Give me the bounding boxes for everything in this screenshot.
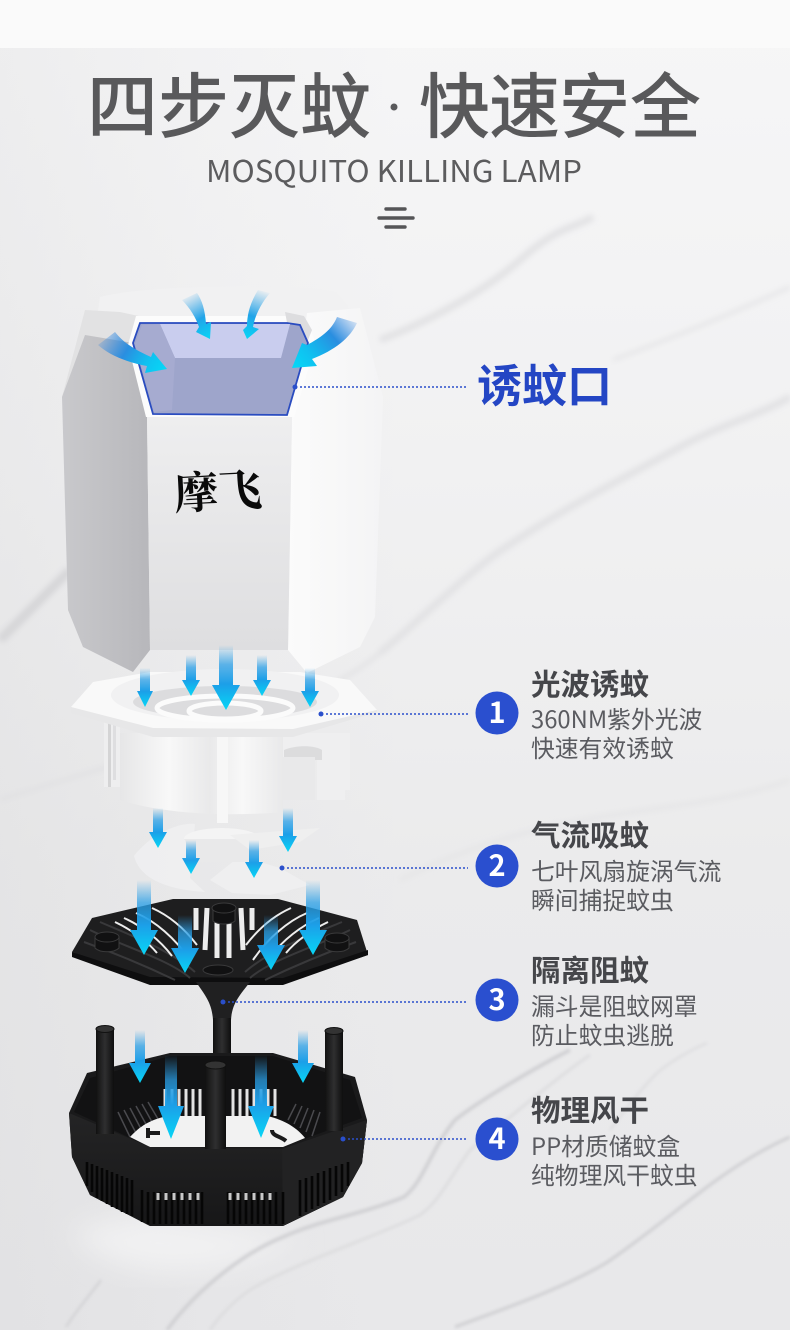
- callout 3: isolation: 漏斗是阻蚊网罩: [531, 987, 698, 1022]
- callout 3: isolation: 防止蚊虫逃脱: [531, 1016, 674, 1051]
- basket pillars: [96, 1029, 114, 1134]
- basket side wall slats: [118, 1102, 320, 1137]
- funnel net: [72, 899, 368, 1068]
- callout 2: airflow suction: [280, 813, 721, 916]
- callout 1: light lure: [318, 662, 703, 764]
- title: [87, 51, 701, 153]
- callout 3: isolation: [220, 948, 698, 1051]
- funnel bolts: [95, 903, 349, 975]
- icon: title ornament: [379, 209, 413, 227]
- callout: lure opening: [292, 350, 612, 415]
- subtitle: MOSQUITO KILLING LAMP: [206, 147, 582, 191]
- lamp lid: [95, 286, 350, 330]
- right assembly: [283, 733, 350, 800]
- callout 1: light lure: 光波诱蚊: [531, 662, 649, 704]
- callout 1: light lure: 快速有效诱蚊: [531, 729, 674, 764]
- callout 1: light lure: 1: [488, 690, 506, 732]
- callout 2: airflow suction: 2: [488, 843, 506, 885]
- arrows: airflow through fan: [149, 808, 297, 878]
- basket floor: [130, 1116, 305, 1147]
- title: 安: [559, 51, 630, 153]
- lamp light plate and cylinder: [71, 669, 377, 823]
- title: 步: [158, 51, 229, 153]
- lamp top housing: [62, 286, 383, 673]
- lamp front face: [147, 417, 292, 650]
- arrows: airflow into lure opening: [98, 290, 357, 373]
- basket outer wall: [69, 1113, 367, 1226]
- window white frame: [128, 316, 316, 417]
- funnel ribs: [84, 922, 356, 980]
- callout 2: airflow suction: 七叶风扇旋涡气流: [531, 852, 721, 887]
- fan: [134, 824, 320, 895]
- callout: lure opening: 诱蚊口: [477, 350, 612, 415]
- arrows: airflow through funnel: [130, 880, 327, 973]
- title: 速: [489, 51, 560, 153]
- callout 4: air drying: 4: [488, 1116, 506, 1158]
- callout 3: isolation: 3: [488, 977, 506, 1019]
- callout 2: airflow suction: 瞬间捕捉蚊虫: [531, 881, 674, 916]
- callout 4: air drying: 纯物理风干蚊虫: [531, 1156, 698, 1191]
- arrows: airflow into basket: [129, 1030, 314, 1139]
- lamp right face: [288, 308, 383, 673]
- title: 快: [419, 51, 490, 153]
- callout 3: isolation: 隔离阻蚊: [531, 948, 649, 990]
- floor reflection: [70, 1215, 300, 1271]
- arrows: airflow through plate: [137, 645, 319, 710]
- title: 全: [630, 51, 701, 153]
- basket vents: [165, 1089, 275, 1116]
- callout 4: air drying: [340, 1088, 698, 1191]
- collection basket: [69, 1026, 367, 1226]
- callout 4: air drying: PP材质储蚊盒: [531, 1127, 680, 1162]
- lure opening window: [133, 323, 308, 415]
- title: 蚊: [300, 51, 371, 153]
- funnel slats: [115, 908, 328, 960]
- lamp brand: 摩飞: [172, 454, 264, 522]
- title: 四: [87, 51, 158, 153]
- funnel stem: [196, 982, 250, 1020]
- callout 4: air drying: 物理风干: [531, 1088, 649, 1130]
- callout 2: airflow suction: 气流吸蚊: [531, 813, 649, 855]
- callout 1: light lure: 360NM紫外光波: [531, 700, 703, 735]
- title: 灭: [229, 51, 300, 153]
